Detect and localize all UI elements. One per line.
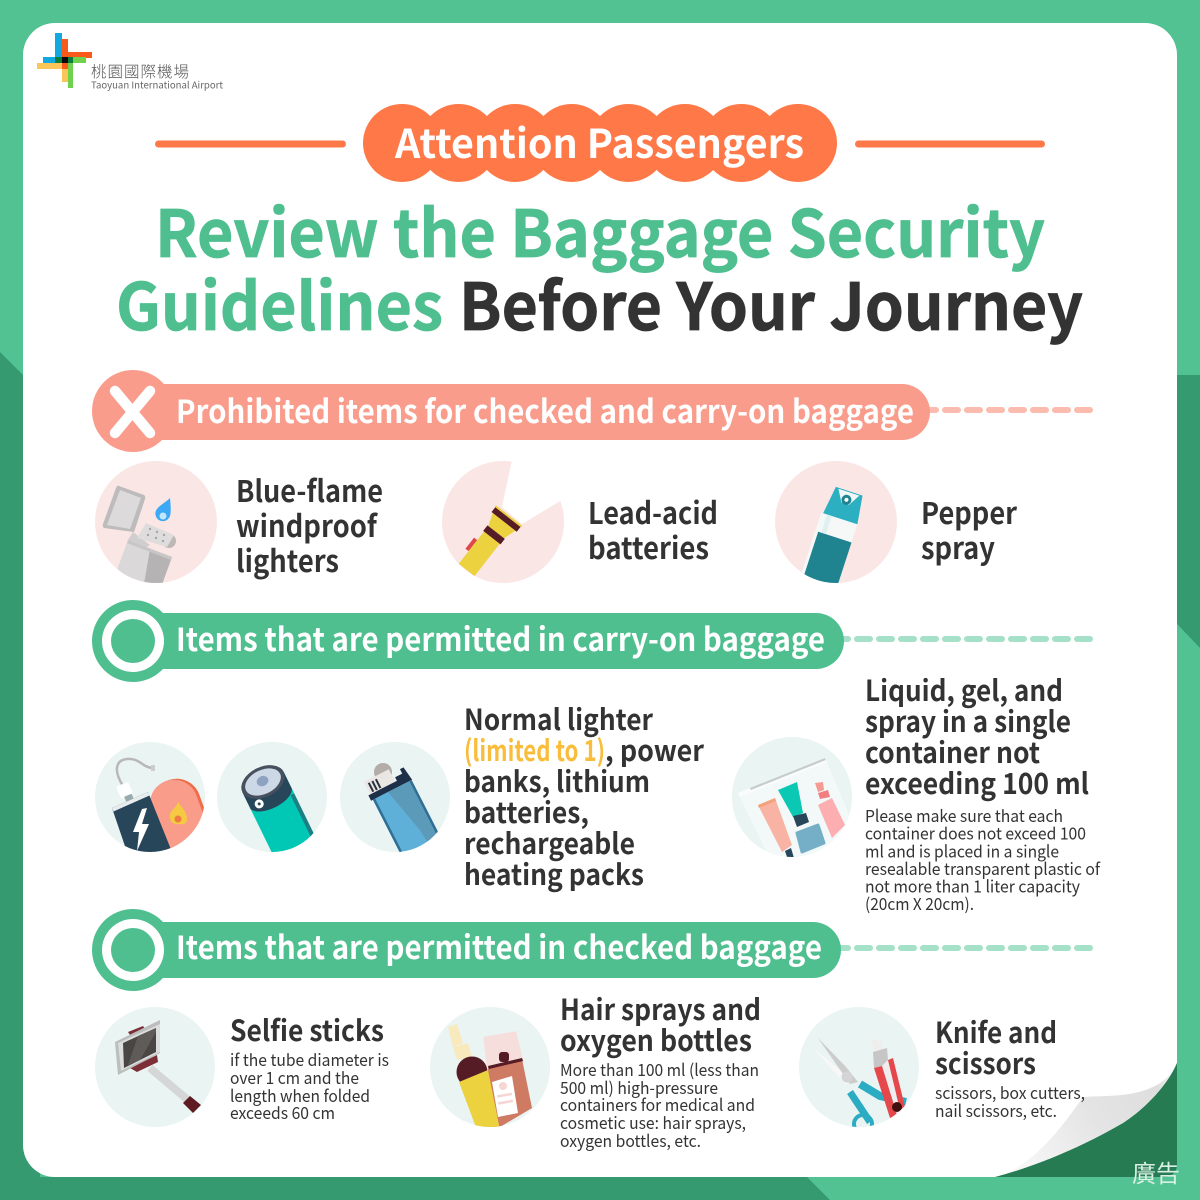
section bar: checked baggage	[92, 909, 1090, 991]
attention banner	[155, 104, 1045, 182]
text: carry-on items: , power	[605, 728, 704, 770]
text: liquid, gel and spray rule: container does not exceed 100	[865, 820, 1086, 844]
main title: Guidelines	[116, 255, 443, 349]
section bar: carry-on baggage	[92, 600, 1090, 682]
logo: Taoyuan International Airport: Taoyuan International Airport	[91, 78, 223, 92]
advertisement mark: 廣告	[1132, 1154, 1180, 1189]
item: hair sprays and oxygen bottles: oxygen bottles	[560, 1018, 752, 1060]
item: blue-flame windproof lighters: windproof	[236, 502, 379, 546]
main title: Before Your Journey	[459, 255, 1083, 349]
item: selfie sticks: length when folded	[230, 1083, 370, 1107]
section bar: carry-on baggage: Items that are permitted in carry-on baggage	[176, 615, 825, 661]
folded page corner	[995, 1063, 1177, 1177]
text: carry-on items: heating packs	[464, 852, 644, 894]
attention banner: Attention Passengers	[394, 112, 804, 170]
text: liquid, gel and spray rule: ml and is placed in a single	[865, 838, 1059, 862]
text: liquid, gel and spray rule: container not	[865, 730, 1040, 772]
item: selfie sticks: if the tube diameter is	[230, 1047, 389, 1071]
item: hair sprays and oxygen bottles: oxygen bottles, etc.	[560, 1128, 701, 1152]
text: carry-on items: Normal lighter	[464, 697, 653, 739]
text: liquid, gel and spray rule: exceeding 100 ml	[865, 761, 1089, 803]
logo: Taoyuan International Airport: 桃園國際機場	[91, 60, 189, 82]
item: selfie sticks: Selfie sticks	[230, 1008, 384, 1050]
item: power bank and heating pack	[95, 742, 205, 852]
item: pepper spray: spray	[921, 524, 995, 568]
item: knife and scissors	[799, 1007, 1085, 1133]
item: selfie sticks: exceeds 60 cm	[230, 1100, 335, 1124]
section bar: prohibited items	[92, 370, 1090, 452]
item: lead-acid batteries	[442, 455, 718, 583]
item: knife and scissors: scissors, box cutters,	[935, 1080, 1085, 1104]
item: hair sprays and oxygen bottles: Hair sprays and	[560, 987, 761, 1029]
section bar: prohibited items: Prohibited items for checked and carry-on baggage	[176, 387, 914, 433]
text: carry-on items: banks, lithium	[464, 759, 650, 801]
item: hair sprays and oxygen bottles: containers for medical and	[560, 1092, 755, 1116]
text: liquid, gel and spray rule: resealable transparent plastic of	[865, 856, 1101, 880]
item: pepper spray	[775, 461, 1017, 583]
item: pepper spray: Pepper	[921, 489, 1018, 533]
text: carry-on items: (limited to 1)	[464, 728, 605, 770]
main title: Review the Baggage Security	[155, 182, 1045, 276]
item: blue-flame windproof lighters	[95, 461, 383, 590]
text: liquid, gel and spray rule: spray in a single	[865, 699, 1071, 741]
item: knife and scissors: scissors	[935, 1041, 1036, 1083]
item: selfie sticks: over 1 cm and the	[230, 1065, 359, 1089]
item: blue-flame windproof lighters: lighters	[236, 537, 339, 581]
text: liquid, gel and spray rule: (20cm X 20cm).	[865, 891, 974, 915]
item: normal lighter	[340, 742, 450, 852]
item: blue-flame windproof lighters: Blue-flame	[236, 467, 383, 511]
section bar: checked baggage: Items that are permitted in checked baggage	[176, 923, 822, 969]
item: hair sprays and oxygen bottles: cosmetic use: hair sprays,	[560, 1110, 746, 1134]
text: carry-on items	[464, 697, 704, 894]
item: lead-acid batteries: Lead-acid	[588, 489, 718, 533]
item: knife and scissors: nail scissors, etc.	[935, 1098, 1057, 1122]
text: liquid, gel and spray rule: Liquid, gel, and	[865, 668, 1063, 710]
item: selfie sticks	[95, 1007, 389, 1127]
text: liquid, gel and spray rule: not more than 1 liter capacity	[865, 874, 1080, 898]
item: lithium battery	[217, 742, 327, 852]
text: liquid, gel and spray rule	[865, 668, 1101, 915]
text: carry-on items: rechargeable	[464, 821, 635, 863]
logo: Taoyuan International Airport	[37, 33, 223, 92]
text: carry-on items: batteries,	[464, 790, 589, 832]
item: knife and scissors: Knife and	[935, 1010, 1057, 1052]
main title	[116, 182, 1083, 349]
item: hair sprays and oxygen bottles	[430, 987, 761, 1152]
item: hair sprays and oxygen bottles: 500 ml) high-pressure	[560, 1075, 718, 1099]
item: lead-acid batteries: batteries	[588, 524, 709, 568]
text: liquid, gel and spray rule: Please make sure that each	[865, 803, 1063, 827]
item: liquids in resealable bag	[732, 737, 852, 857]
item: hair sprays and oxygen bottles: More than 100 ml (less than	[560, 1057, 759, 1081]
